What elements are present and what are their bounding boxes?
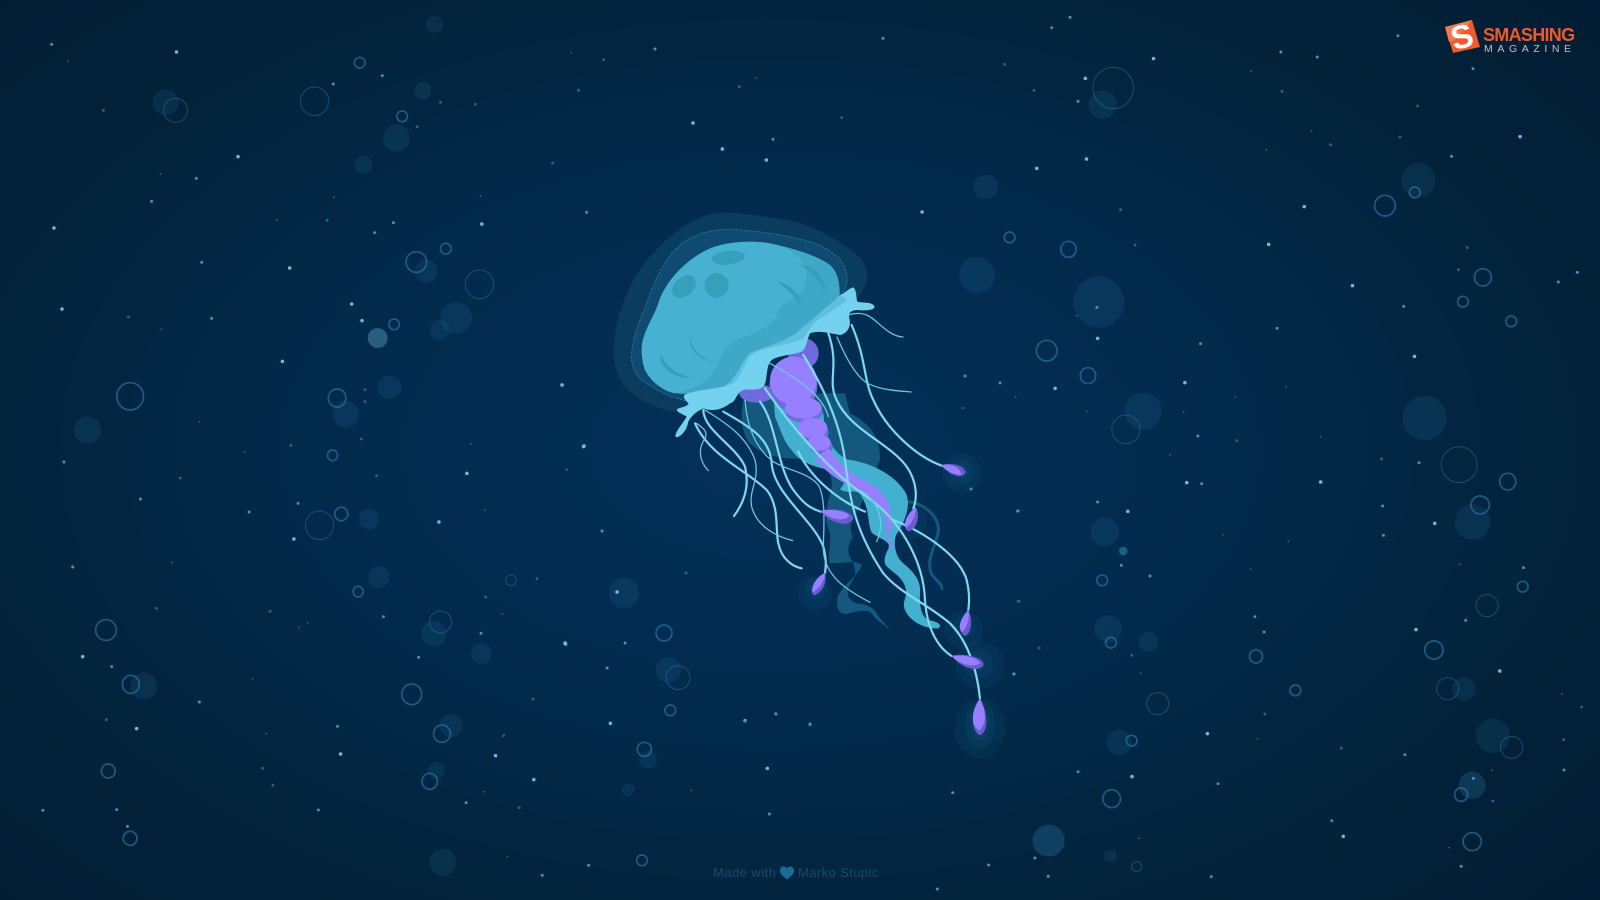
bubbles and dots: upper right	[1004, 17, 1577, 444]
dark side ribbon	[905, 502, 942, 589]
logo wordmark: SMASHING	[1483, 25, 1574, 45]
tip glows	[798, 453, 1005, 758]
bell rim shading	[685, 295, 847, 395]
logo mark: S	[1447, 16, 1477, 57]
bubbles and dots: top centre	[604, 38, 998, 199]
bell rim	[676, 287, 874, 437]
logo subtitle: MAGAZINE	[1484, 43, 1576, 55]
bubbles and dots: bottom centre	[607, 643, 989, 889]
jellyfish	[614, 213, 1005, 758]
purple stomach	[739, 338, 893, 548]
icon: heart	[780, 866, 794, 880]
logo: Smashing Magazine	[1445, 16, 1576, 57]
dark tail ribbon	[742, 393, 891, 632]
credit line	[713, 865, 879, 880]
teal tail ribbon	[773, 393, 940, 628]
bubbles and dots: middle band	[562, 212, 1018, 724]
bell dome	[642, 242, 840, 394]
bell highlight	[642, 242, 807, 393]
tentacle tip bulbs	[812, 464, 986, 735]
bubbles and dots: lower left	[43, 450, 589, 876]
bell	[642, 242, 874, 437]
credit text right: Marko Stupic	[798, 865, 879, 880]
bell spots	[660, 249, 827, 379]
credit text left: Made with	[713, 865, 776, 880]
bubbles and dots: lower right	[1014, 447, 1582, 877]
tail, tentacles and stomach	[695, 313, 1005, 758]
tentacles	[695, 313, 980, 698]
bell halo	[614, 213, 867, 412]
bubbles and dots: upper left	[52, 16, 587, 447]
